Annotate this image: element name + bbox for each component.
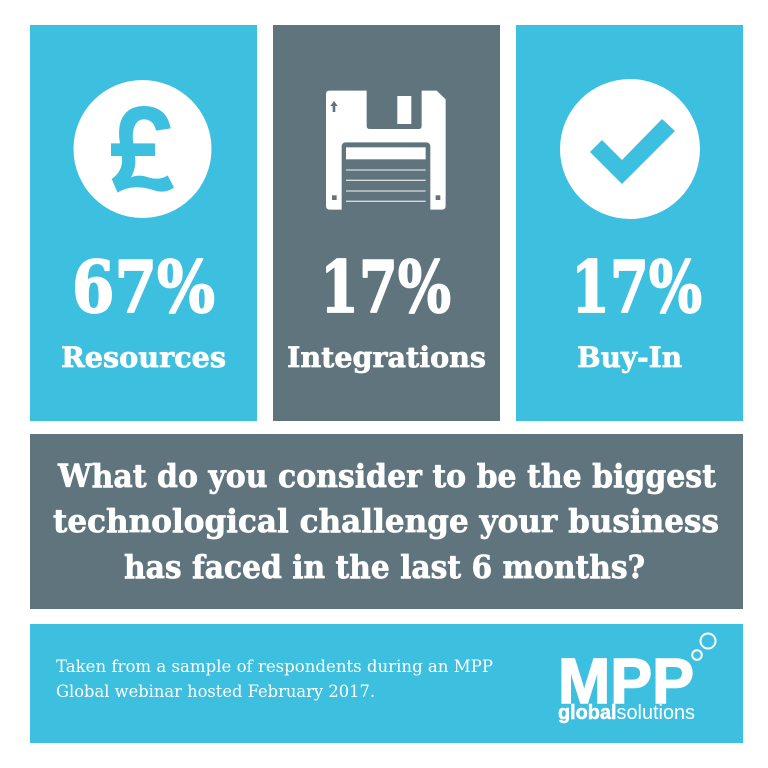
question text: has faced in the last 6 months? — [124, 548, 645, 586]
stat: 17%: 17% — [571, 245, 702, 329]
panel: footer — [30, 624, 743, 743]
icon: check mark — [560, 79, 700, 219]
panel: integrations — [273, 25, 500, 421]
question text: technological challenge your business — [53, 502, 719, 540]
icon: pound coin — [74, 80, 212, 218]
question text: What do you consider to be the biggest — [57, 457, 716, 495]
label: Integrations: Integrations — [287, 341, 486, 374]
stat: 67%: 67% — [72, 245, 215, 329]
question text — [53, 457, 719, 586]
panel: resources — [30, 25, 257, 421]
source note: Global webinar hosted February 2017. — [56, 682, 375, 702]
logo: MPP global solutions: globalsolutions — [558, 702, 695, 724]
source note: Taken from a sample of respondents during an MPP — [56, 657, 493, 677]
panel: survey question — [30, 434, 743, 609]
label: Resources: Resources — [61, 341, 226, 374]
source note — [56, 657, 493, 702]
stat: 17%: 17% — [320, 245, 451, 329]
panel: buy-in — [516, 25, 743, 421]
logo: MPP global solutions: MPP — [558, 645, 694, 717]
icon: floppy disk — [326, 91, 446, 210]
label: Buy-In: Buy-In — [577, 341, 682, 374]
